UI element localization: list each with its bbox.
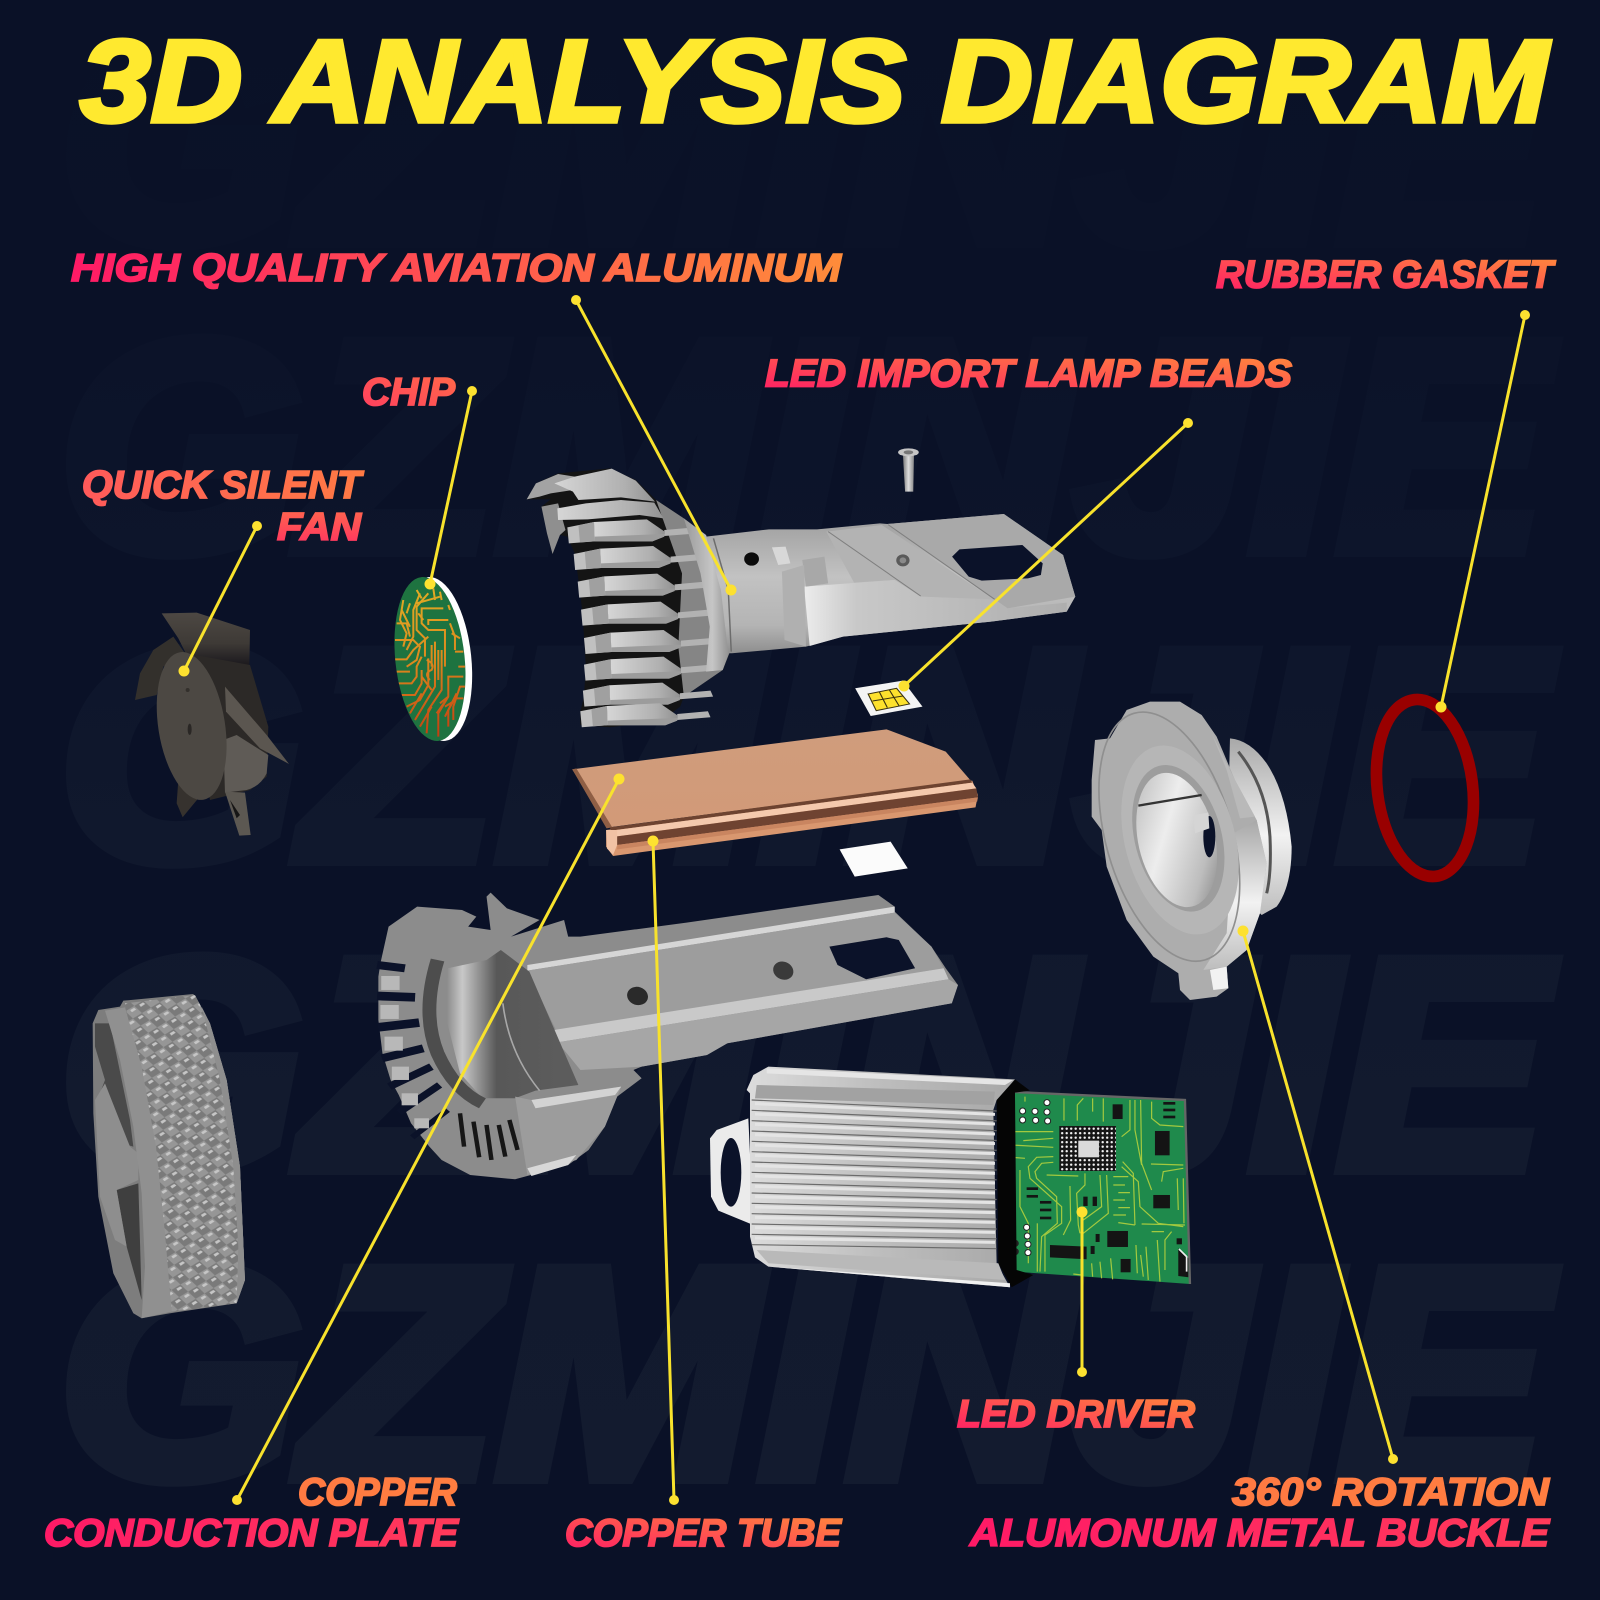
icon: chip bbox=[394, 577, 472, 741]
top hook bbox=[527, 474, 575, 499]
holes bbox=[744, 552, 759, 566]
label: LED import lamp beads: LED IMPORT LAMP BEADS bbox=[765, 352, 1292, 396]
fins gaps bbox=[377, 965, 448, 1137]
mounting tab bbox=[710, 1118, 753, 1225]
icon: LED driver board in housing bbox=[710, 1067, 1190, 1287]
leader: LED beads bbox=[898, 418, 1193, 692]
title: 3D ANALYSIS DIAGRAM bbox=[80, 16, 1551, 146]
label: 360 rotation aluminum metal buckle bbox=[969, 1471, 1550, 1555]
thermal pad bbox=[840, 842, 908, 877]
leader: copper plate bbox=[232, 774, 624, 1505]
icon: fan bbox=[135, 613, 289, 836]
pcb bbox=[1008, 1092, 1190, 1284]
icon: copper conduction plate and tube bbox=[572, 729, 978, 877]
rails bbox=[527, 907, 895, 971]
leader lines bbox=[178, 295, 1530, 1505]
icon: LED lamp beads bbox=[855, 681, 922, 716]
ring bbox=[429, 960, 482, 1103]
housing ribs bbox=[752, 1100, 997, 1249]
leader: aluminum bbox=[571, 295, 736, 596]
icon: metal buckle bbox=[1073, 696, 1292, 1000]
label: quick silent fan: QUICK SILENT bbox=[82, 464, 364, 507]
label: 360 rotation aluminum metal buckle: ALUMONUM METAL BUCKLE bbox=[969, 1512, 1550, 1555]
label: quick silent fan: FAN bbox=[277, 506, 362, 549]
label: rubber gasket: RUBBER GASKET bbox=[1216, 254, 1556, 296]
tube bbox=[606, 781, 978, 856]
cavity bbox=[447, 950, 578, 1098]
leader: fan bbox=[178, 521, 262, 676]
watermark: GZMINJIE rows: GZMINJIE bbox=[58, 278, 1558, 614]
fin highlights bbox=[380, 976, 429, 1128]
icon: screw bbox=[898, 448, 919, 492]
label: copper conduction plate: COPPER bbox=[298, 1471, 457, 1514]
label: 360 rotation aluminum metal buckle: 360° ROTATION bbox=[1232, 1471, 1550, 1514]
label: high quality aviation aluminum: HIGH QUALITY AVIATION ALUMINUM bbox=[71, 247, 843, 290]
housing bbox=[997, 1079, 1033, 1287]
leader: gasket bbox=[1436, 310, 1530, 712]
rear flange bbox=[1227, 738, 1292, 915]
icon: rubber gasket bbox=[1367, 694, 1483, 882]
plate top bbox=[572, 729, 970, 827]
vias bbox=[1012, 1100, 1051, 1256]
holes bbox=[623, 984, 652, 1008]
icon: aviation aluminum upper heat sink bbox=[527, 468, 1075, 727]
shaft bbox=[706, 514, 1075, 653]
label: LED driver: LED DRIVER bbox=[957, 1393, 1195, 1436]
label: copper tube: COPPER TUBE bbox=[565, 1512, 842, 1555]
leader: LED driver bbox=[1076, 1206, 1088, 1377]
bright rim bbox=[1203, 820, 1267, 970]
slot bbox=[829, 937, 915, 979]
labels bbox=[44, 247, 1556, 1555]
leader: chip bbox=[424, 386, 477, 590]
traces bbox=[1012, 1097, 1185, 1282]
label: copper conduction plate: CONDUCTION PLATE bbox=[44, 1512, 459, 1555]
leader: buckle bbox=[1238, 926, 1398, 1464]
label: quick silent fan bbox=[82, 464, 364, 549]
fins dark base bbox=[527, 468, 732, 727]
small ICs bbox=[1027, 1102, 1188, 1277]
label: copper conduction plate bbox=[44, 1471, 459, 1555]
watermark: GZMINJIE rows: GZMINJIE bbox=[58, 587, 1558, 923]
main plate bbox=[1092, 702, 1267, 1000]
lower plate bbox=[515, 1087, 621, 1175]
face rings bbox=[1073, 696, 1266, 977]
flange bbox=[684, 518, 731, 672]
bottom fin slits bbox=[460, 1113, 518, 1160]
icon: lower heat sink half bbox=[377, 893, 958, 1179]
watermark: GZMINJIE rows: GZMINJIE bbox=[58, 1205, 1558, 1541]
collar behind wedges bbox=[656, 500, 732, 697]
watermark: GZMINJIE rows: GZMINJIE bbox=[58, 896, 1558, 1232]
leader: copper tube bbox=[648, 836, 679, 1505]
bore bbox=[1124, 765, 1229, 915]
icon: knurled knob bbox=[93, 994, 245, 1318]
label: chip: CHIP bbox=[362, 371, 456, 414]
slot bbox=[952, 545, 1043, 581]
BGA processor bbox=[1059, 1126, 1116, 1171]
